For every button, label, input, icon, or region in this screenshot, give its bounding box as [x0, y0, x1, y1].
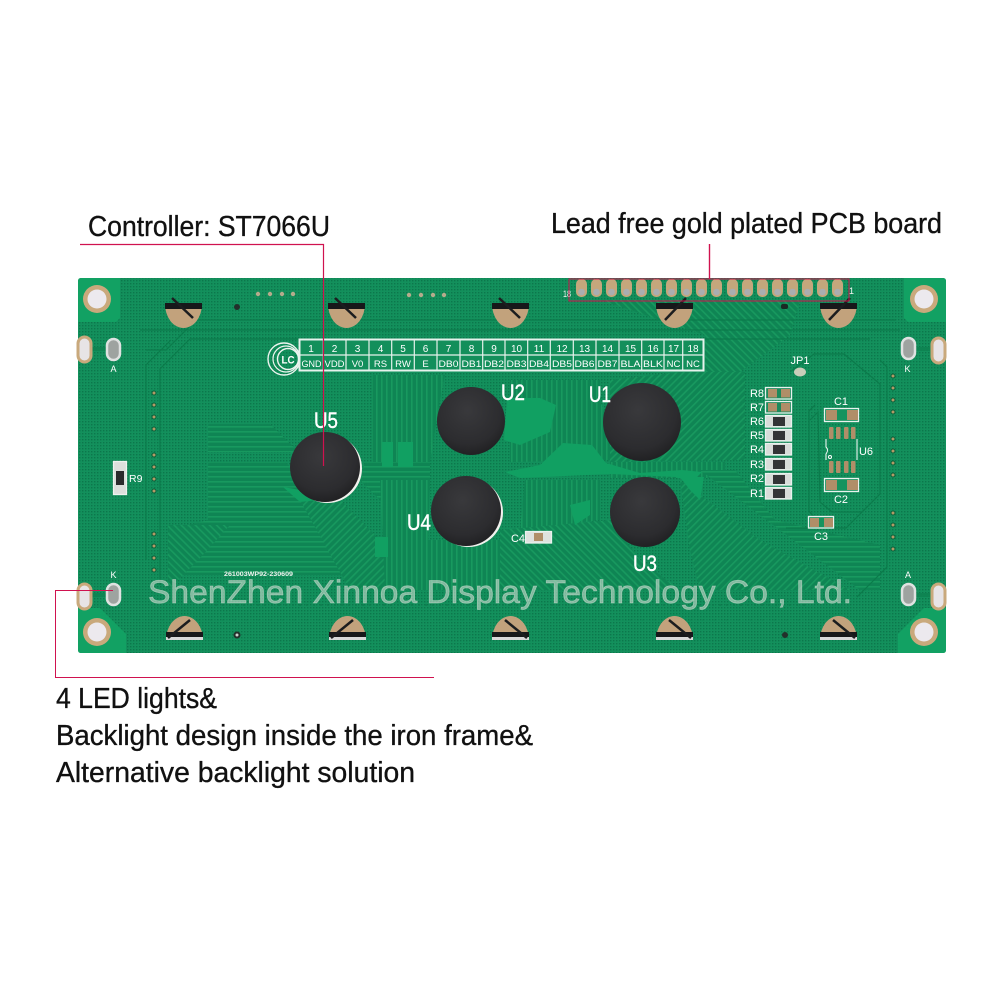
pin table: 9	[491, 344, 497, 355]
PCB board	[78, 278, 946, 653]
pin table: 8	[469, 344, 475, 355]
LC logo: LC	[282, 354, 295, 366]
chip labels: U2	[501, 380, 525, 405]
LC logo	[268, 343, 300, 375]
resistor R9	[114, 462, 143, 494]
pin table: GND	[302, 359, 322, 370]
side LED pads: A	[905, 570, 911, 580]
pin table: 10	[511, 344, 522, 355]
corner copper-free zones	[78, 278, 946, 653]
callout: controller: Controller: ST7066U	[88, 211, 330, 243]
resistors R1-R8: R6	[750, 416, 764, 428]
side LED pads: K	[904, 364, 911, 374]
outline tracks	[130, 320, 900, 620]
pin table: DB6	[574, 359, 594, 370]
pin table: 1	[308, 344, 314, 355]
resistors R1-R8: R7	[750, 402, 764, 414]
pin table: 18	[687, 344, 699, 355]
pin table: 11	[534, 344, 545, 355]
resistors R1-R8	[750, 388, 792, 500]
pin table: RW	[395, 359, 411, 370]
pin table: 17	[668, 344, 679, 355]
resistors R1-R8: R2	[750, 473, 764, 485]
pin table: 6	[423, 344, 429, 355]
pin table: E	[422, 359, 429, 370]
pin table: V0	[352, 359, 363, 370]
chip labels: U4	[407, 510, 431, 535]
trace bundles	[168, 300, 880, 590]
capacitors C1-C4 and U6: C1	[834, 396, 848, 408]
callout: LED lights: 4 LED lights&	[56, 683, 217, 715]
connector pads 1-18: 1	[849, 286, 854, 296]
pin table: 13	[579, 344, 590, 355]
pin table: BLK	[643, 359, 664, 370]
capacitors C1-C4 and U6	[511, 355, 873, 545]
capacitors C1-C4 and U6: U6	[859, 446, 873, 458]
pin table: 2	[332, 344, 338, 355]
capacitors C1-C4 and U6: C4	[511, 533, 525, 545]
pin table	[299, 340, 704, 370]
pin table: DB4	[529, 359, 549, 370]
pin table: DB3	[506, 359, 526, 370]
pin table: 7	[446, 344, 452, 355]
chip labels: U3	[633, 551, 657, 576]
pin table: DB5	[552, 359, 572, 370]
top frame tabs	[165, 298, 857, 328]
callout: controller	[80, 211, 330, 466]
resistors R1-R8: R4	[750, 444, 764, 456]
via columns and small holes	[152, 292, 895, 638]
pin table: RS	[374, 359, 387, 370]
pin table: NC	[686, 359, 700, 370]
pin table: 5	[400, 344, 406, 355]
chip labels	[314, 380, 657, 576]
resistors R1-R8: R1	[750, 488, 764, 500]
pin table: VDD	[324, 359, 345, 370]
pin table: 16	[647, 344, 659, 355]
bottom frame tabs	[166, 616, 857, 640]
watermark: ShenZhen Xinnoa Display Technology Co., Ltd.	[148, 574, 852, 610]
pin table: NC	[667, 359, 680, 370]
resistors R1-R8: R8	[750, 388, 764, 400]
side LED pads: K	[110, 570, 117, 580]
connector pads 1-18	[563, 279, 854, 299]
pin table: BLA	[620, 359, 641, 370]
epoxy chip blobs	[290, 383, 681, 547]
callout: LED lights: Alternative backlight solution	[56, 757, 415, 789]
side LED pads	[78, 337, 945, 609]
capacitors C1-C4 and U6: C3	[814, 531, 828, 543]
chip labels: U5	[314, 408, 338, 433]
pin table: 4	[378, 344, 384, 355]
callout: LED lights	[56, 590, 533, 789]
pin table: DB0	[438, 359, 458, 370]
pin table: 15	[625, 344, 636, 355]
connector pads 1-18: 18	[563, 289, 571, 299]
resistors R1-R8: R3	[750, 459, 764, 471]
board serial number: 261003WP92-230609	[224, 571, 293, 578]
callout: gold plated board: Lead free gold plated PCB board	[551, 208, 942, 240]
bright ground pours	[283, 398, 704, 557]
capacitors C1-C4 and U6: C2	[834, 494, 848, 506]
side LED pads: A	[110, 364, 117, 374]
pin table: 3	[355, 344, 361, 355]
pin table: DB2	[484, 359, 504, 370]
pin table: DB7	[598, 359, 618, 370]
resistors R1-R8: R5	[750, 430, 764, 442]
capacitors C1-C4 and U6: JP1	[791, 355, 809, 367]
pin table: DB1	[462, 359, 482, 370]
callout: gold plated board	[551, 208, 942, 301]
resistor R9: R9	[129, 473, 143, 485]
callout: LED lights: Backlight design inside the iron frame&	[56, 720, 533, 752]
corner mounting holes	[83, 285, 938, 646]
pin table: 12	[556, 344, 568, 355]
chip labels: U1	[589, 382, 611, 407]
pin table: 14	[602, 344, 613, 355]
